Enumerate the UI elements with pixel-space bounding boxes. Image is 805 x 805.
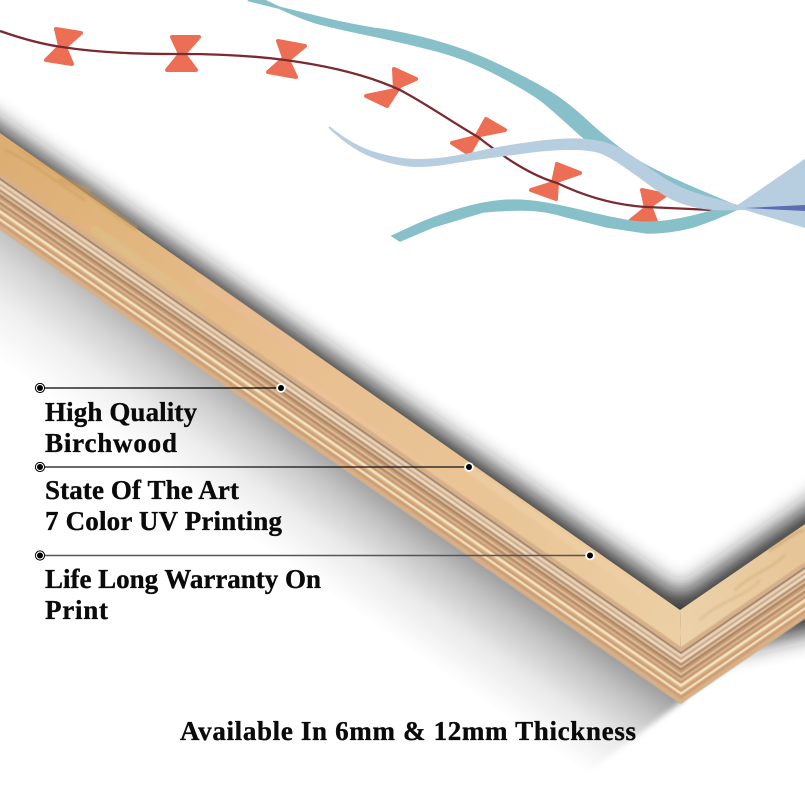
frame layered side: [0, 158, 805, 697]
frame top face left: [0, 112, 681, 654]
bow 6: [531, 164, 580, 199]
string: [0, 31, 712, 210]
start marker: [35, 383, 45, 393]
connector line: [40, 387, 281, 389]
end marker: [464, 462, 474, 472]
bow 2: [167, 37, 199, 70]
label: Print: [45, 595, 108, 625]
bow 1: [46, 29, 81, 64]
bow 5: [452, 119, 505, 154]
bow 7: [630, 190, 666, 224]
callout: UV printing: [35, 462, 474, 536]
wood grain: [5, 150, 803, 645]
ribbon: pale blue: [329, 127, 805, 227]
label: State Of The Art: [45, 475, 239, 505]
label: [45, 397, 198, 458]
frame: birch plywood corner: [0, 112, 805, 697]
connector line: [40, 466, 469, 468]
ribbon: dark blue centre: [745, 205, 805, 211]
ribbon: lower teal: [392, 200, 740, 241]
label: Birchwood: [45, 428, 177, 458]
start marker: [35, 551, 45, 560]
end marker: [585, 551, 595, 560]
bow 4: [366, 69, 416, 106]
shadow: cast below frame: [0, 200, 684, 800]
label: [45, 475, 282, 536]
callout: warranty: [35, 551, 595, 625]
end marker: [276, 383, 286, 393]
connector line: [40, 554, 590, 556]
footer: thickness note: Available In 6mm & 12mm Thickness: [180, 716, 636, 746]
artwork: kite ribbons and bows: [0, 0, 805, 241]
label: High Quality: [45, 397, 198, 427]
ribbon: upper teal: [248, 0, 740, 208]
shadow: behind inner frame edge: [0, 84, 805, 660]
label: Life Long Warranty On: [45, 564, 321, 594]
callout: high quality birchwood: [35, 383, 286, 458]
frame top face right: [680, 500, 805, 654]
label: [45, 564, 321, 625]
bow 3: [268, 41, 305, 77]
label: 7 Color UV Printing: [45, 506, 282, 536]
start marker: [35, 462, 45, 472]
